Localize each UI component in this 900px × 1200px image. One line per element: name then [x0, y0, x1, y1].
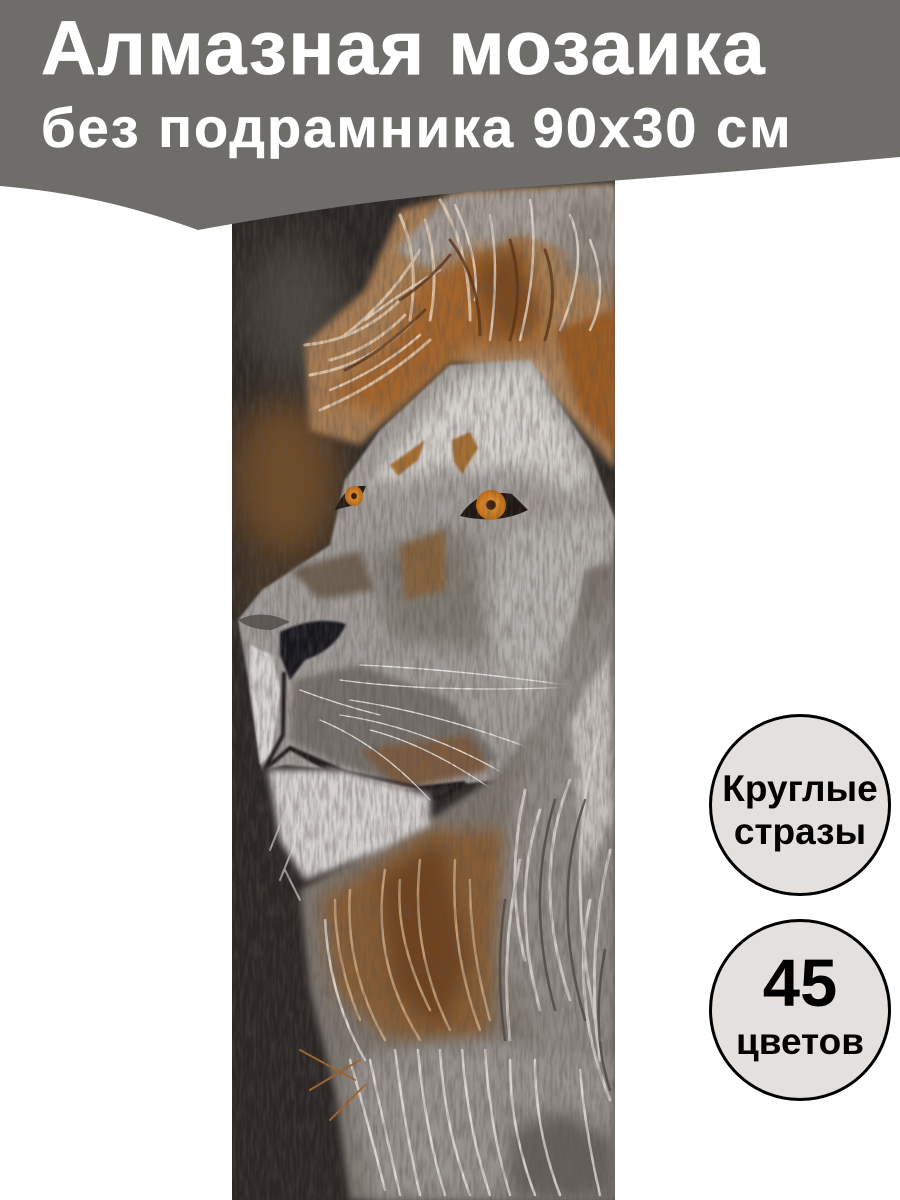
header banner [0, 0, 900, 230]
background texture [230, 180, 615, 1200]
icon: lion nose and mouth [238, 614, 465, 798]
lion top mane [305, 185, 615, 470]
badge: 45 colours: 45 [763, 946, 837, 1021]
badge: round rhinestones [709, 714, 891, 896]
icon: orange fur marks [390, 432, 478, 476]
lion face [238, 360, 615, 800]
fur grain overlay [232, 180, 615, 1200]
lion artwork panel [232, 180, 615, 1200]
badge: 45 colours: цветов [736, 1021, 864, 1062]
lion lower mane [268, 560, 615, 1200]
badge: round rhinestones: стразы [734, 811, 866, 852]
title: Алмазная мозаика [41, 6, 766, 91]
icon: lion eyes [335, 486, 528, 520]
badge: round rhinestones: Круглые [722, 768, 878, 809]
subtitle: без подрамника 90х30 см [41, 96, 793, 159]
badge: 45 colours [709, 919, 891, 1101]
